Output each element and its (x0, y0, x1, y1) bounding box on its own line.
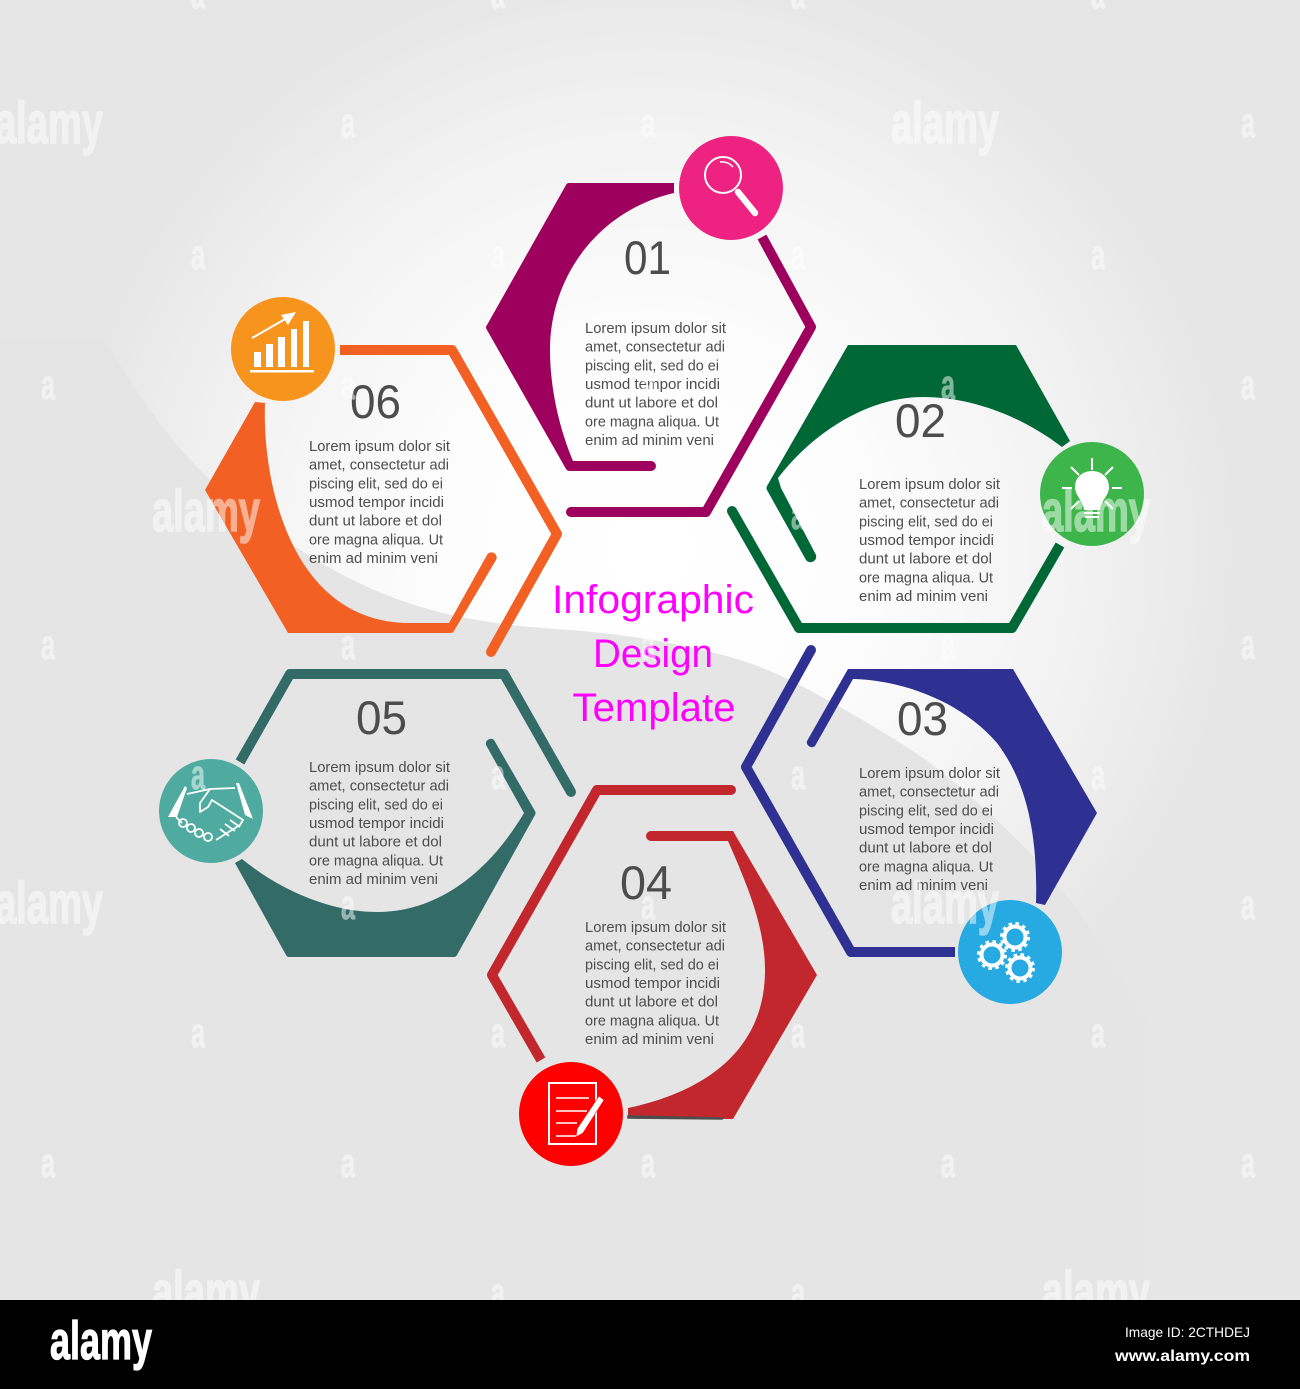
watermarks: a (1091, 751, 1105, 798)
text 04 (585, 920, 726, 1048)
text 02: enim ad minim veni (859, 589, 988, 605)
panel: 03 (746, 645, 1097, 1004)
outline cap 02 (727, 506, 737, 516)
text 01: amet, consectetur adi (585, 340, 725, 356)
crescent 05 (235, 739, 536, 957)
icon: document and pencil (519, 1062, 623, 1166)
number 06: 06 (350, 375, 401, 428)
panel: 01 (486, 136, 811, 517)
text 03: usmod tempor incidi (859, 822, 994, 838)
text 05 (309, 760, 450, 888)
title: Design (593, 632, 713, 676)
watermarks: a (791, 1009, 805, 1056)
text 01: ore magna aliqua. Ut (585, 414, 719, 430)
number 02: 02 (895, 394, 946, 447)
watermarks: a (791, 231, 805, 278)
text 04: amet, consectetur adi (585, 939, 725, 955)
number 01: 01 (624, 231, 671, 284)
icon: magnifier (679, 136, 783, 240)
watermarks: a (1241, 99, 1255, 146)
watermarks: alamy (891, 91, 999, 156)
title: Infographic (552, 578, 754, 622)
text 03: amet, consectetur adi (859, 785, 999, 801)
watermarks: alamy (152, 1260, 260, 1325)
outline cap 06 (486, 647, 496, 657)
watermarks: a (641, 881, 655, 928)
title (552, 578, 754, 730)
text 02: Lorem ipsum dolor sit (859, 477, 1000, 493)
text 06: amet, consectetur adi (309, 458, 449, 474)
watermarks: a (491, 1269, 505, 1316)
text 01: enim ad minim veni (585, 433, 714, 449)
icon: light bulb (1040, 442, 1144, 546)
text 04: dunt ut labore et dol (585, 995, 718, 1011)
text 01: dunt ut labore et dol (585, 396, 718, 412)
watermarks: a (491, 751, 505, 798)
outline cap 01 (566, 507, 576, 517)
text 04: ore magna aliqua. Ut (585, 1013, 719, 1029)
icon: gears (958, 900, 1062, 1004)
number 04: 04 (620, 856, 672, 909)
watermarks: alamy (891, 871, 999, 936)
text 05: dunt ut labore et dol (309, 835, 442, 851)
panel: 04 (492, 785, 817, 1166)
watermarks: a (791, 1269, 805, 1316)
watermarks: a (341, 881, 355, 928)
watermarks: a (191, 231, 205, 278)
outline 05 (240, 674, 571, 792)
text 03: dunt ut labore et dol (859, 841, 992, 857)
text 06: usmod tempor incidi (309, 495, 444, 511)
background swoosh (0, 340, 1150, 1300)
watermarks: a (341, 621, 355, 668)
watermarks: a (1241, 1139, 1255, 1186)
watermarks: a (1091, 1009, 1105, 1056)
text 03: ore magna aliqua. Ut (859, 859, 993, 875)
watermarks: a (191, 1009, 205, 1056)
text 05: usmod tempor incidi (309, 816, 444, 832)
watermarks: a (41, 361, 55, 408)
dark edge 04 (628, 1116, 722, 1119)
watermarks: a (941, 621, 955, 668)
footer band (0, 1300, 1300, 1389)
watermarks: a (1241, 881, 1255, 928)
watermarks: a (341, 99, 355, 146)
number 03: 03 (897, 692, 948, 745)
text 06 (309, 439, 450, 567)
watermarks: a (491, 491, 505, 538)
watermarks: a (1241, 361, 1255, 408)
text 04: piscing elit, sed do ei (585, 957, 719, 973)
text 05: piscing elit, sed do ei (309, 797, 443, 813)
outline cap 04 (726, 785, 736, 795)
watermarks: a (791, 751, 805, 798)
text 04: enim ad minim veni (585, 1032, 714, 1048)
watermarks: alamy (1042, 1260, 1150, 1325)
watermarks: a (341, 361, 355, 408)
text 04: usmod tempor incidi (585, 976, 720, 992)
icon: handshake (159, 759, 263, 863)
panel: 06 (205, 297, 557, 657)
outline cap 03 (806, 645, 816, 655)
watermarks: a (1241, 621, 1255, 668)
crescent 04 (628, 831, 817, 1119)
text 02: amet, consectetur adi (859, 496, 999, 512)
panel: 05 (159, 674, 576, 957)
crescent 06 (205, 402, 497, 633)
watermarks: a (941, 1139, 955, 1186)
text 05: ore magna aliqua. Ut (309, 853, 443, 869)
crescent 02 (766, 345, 1070, 562)
text 02 (859, 477, 1000, 605)
outline 04 (492, 790, 731, 1060)
text 03 (859, 766, 1000, 894)
text 01 (585, 321, 726, 449)
text 03: Lorem ipsum dolor sit (859, 766, 1000, 782)
outline 02 (732, 511, 1060, 628)
watermarks: a (41, 621, 55, 668)
watermarks: a (641, 1139, 655, 1186)
watermarks: a (1091, 231, 1105, 278)
outline 06 (340, 350, 557, 652)
text 06: enim ad minim veni (309, 551, 438, 567)
text 01: piscing elit, sed do ei (585, 358, 719, 374)
text 02: ore magna aliqua. Ut (859, 570, 993, 586)
text 01: usmod tempor incidi (585, 377, 720, 393)
text 04: Lorem ipsum dolor sit (585, 920, 726, 936)
text 05: enim ad minim veni (309, 872, 438, 888)
watermarks: a (641, 99, 655, 146)
watermarks: alamy (152, 479, 260, 544)
outline 01 (571, 237, 811, 512)
text 02: dunt ut labore et dol (859, 552, 992, 568)
watermarks: a (341, 1139, 355, 1186)
text 03: piscing elit, sed do ei (859, 803, 993, 819)
crescent 01 (486, 183, 674, 471)
text 06: dunt ut labore et dol (309, 514, 442, 530)
watermarks: a (191, 751, 205, 798)
outline cap 05 (566, 787, 576, 797)
footer logo: alamy (50, 1311, 152, 1371)
panel: 02 (727, 345, 1144, 628)
text 03: enim ad minim veni (859, 878, 988, 894)
text 02: usmod tempor incidi (859, 533, 994, 549)
watermarks: a (641, 361, 655, 408)
icon: rising bar chart (231, 297, 335, 401)
footer image id: Image ID: 2CTHDEJ (1125, 1324, 1250, 1340)
title: Template (572, 686, 736, 730)
number 05: 05 (356, 691, 407, 744)
text 01: Lorem ipsum dolor sit (585, 321, 726, 337)
watermarks: a (791, 491, 805, 538)
text 02: piscing elit, sed do ei (859, 514, 993, 530)
watermarks: alamy (1042, 479, 1150, 544)
text 06: piscing elit, sed do ei (309, 476, 443, 492)
crescent 03 (807, 669, 1097, 905)
text 05: amet, consectetur adi (309, 779, 449, 795)
watermarks: a (941, 361, 955, 408)
footer url: www.alamy.com (1114, 1348, 1250, 1365)
outline 03 (746, 650, 955, 952)
watermarks: a (491, 231, 505, 278)
text 06: ore magna aliqua. Ut (309, 532, 443, 548)
text 06: Lorem ipsum dolor sit (309, 439, 450, 455)
watermarks: a (641, 621, 655, 668)
watermarks: a (41, 1139, 55, 1186)
watermarks: a (491, 1009, 505, 1056)
text 05: Lorem ipsum dolor sit (309, 760, 450, 776)
